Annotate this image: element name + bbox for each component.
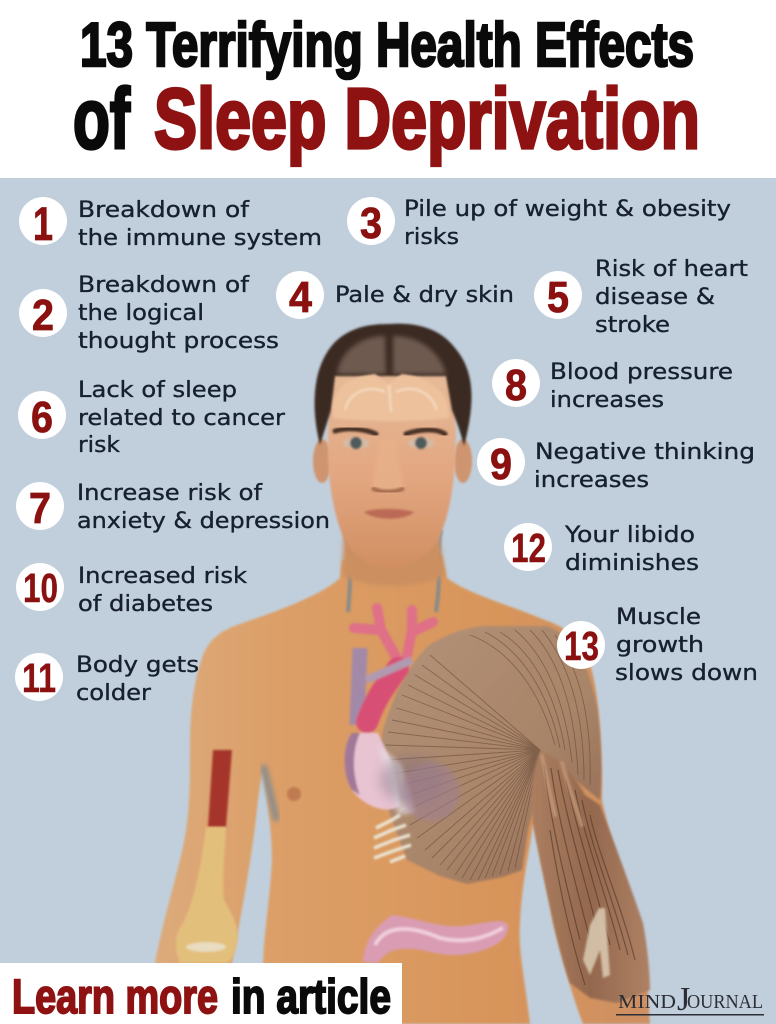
text 10 [78,564,247,617]
left carotid artery branch [354,608,398,660]
armpit hair [264,768,276,818]
callout 4: skin [276,271,514,322]
text 11: colder [76,681,152,706]
number 13: 13 [564,623,599,669]
badge 6 [18,391,66,439]
callout 12: libido [504,523,699,576]
text 13: slows down [615,661,758,686]
left arm bone: joint highlight [186,942,226,952]
text 11 [76,653,199,706]
badge 5 [534,271,582,319]
text 2 [78,273,279,354]
number 7: 7 [29,484,51,533]
callout 5: heart disease [534,257,748,338]
text 3: Pile up of weight & obesity [404,197,731,222]
badge 9 [477,438,525,486]
badge 1 [19,197,67,245]
nipple [287,787,301,801]
intestine highlights [375,928,503,945]
number 6: 6 [31,393,53,442]
right carotid artery branch [407,610,433,656]
text 5: Risk of heart [595,257,748,282]
number 10: 10 [23,565,58,611]
text 13: Muscle [616,605,701,630]
heart and arteries [344,608,433,810]
badge 13 [557,621,605,669]
badge 12 [504,523,552,571]
text 5 [595,257,748,338]
number 2: 2 [32,291,54,340]
callout 6: cancer [18,378,286,458]
text 5: stroke [595,313,670,338]
callout 7: anxiety and depression [16,481,330,534]
text 10: Increased risk [78,564,247,589]
number 1: 1 [33,197,53,250]
callout 10: diabetes [16,563,247,617]
title [73,11,700,167]
mouth [364,509,414,519]
callout 3: weight and obesity [347,197,731,250]
footer white box [0,963,402,1024]
callout 1: immune system [19,197,322,251]
text 6: risk [78,433,120,458]
number 9: 9 [490,440,512,489]
text 8 [550,360,733,413]
badge 10 [16,563,64,611]
human figure illustration [150,324,650,1024]
text 7: anxiety & depression [77,509,330,534]
number 12: 12 [511,525,546,571]
learn more text: Learn more [12,971,218,1024]
hair [315,324,471,446]
text 11: Body gets [76,653,199,678]
text 10: of diabetes [78,592,213,617]
badge 7 [16,482,64,530]
pulmonary vessel [366,660,412,680]
badge 11 [15,653,63,701]
pectoral fibres [385,630,590,880]
aortic arch [367,668,398,722]
callout 11: body temperature [15,653,199,706]
text 1 [78,198,322,251]
vena cava [357,648,360,725]
callout 8: blood pressure [492,359,733,413]
eyes [343,437,434,449]
neck veins [345,528,441,612]
logo: Mind Journal [616,981,764,1018]
ribs cartilage [374,815,411,862]
text 6: related to cancer [78,406,286,431]
brain forehead patch [332,374,449,421]
brain fissure [387,332,391,376]
text 12: diminishes [565,551,699,576]
text 13: growth [616,633,704,658]
text 3 [404,197,731,250]
callout 9: negative thinking [477,438,755,493]
wrist tendons [583,908,610,978]
callout 13: muscle growth [557,605,758,686]
nose shadow [372,488,404,492]
forearm muscle lines [544,765,635,985]
heart shadow patch [380,756,444,804]
badge 3 [347,197,395,245]
text 8: increases [550,388,664,413]
text 3: risks [404,225,459,250]
pectoral muscle [376,626,601,884]
badge 4 [276,271,324,319]
text 9 [534,440,755,493]
left arm bone: shaft and joint [176,827,238,963]
logo: Mind Journal: MIND [618,991,676,1013]
text 13 [615,605,758,686]
text 2: thought process [78,329,279,354]
ears [313,439,472,483]
text 6: Lack of sleep [78,378,237,403]
logo: Mind Journal: J [677,981,690,1018]
text 6 [78,378,286,458]
text 7 [77,481,330,534]
text 8: Blood pressure [550,360,733,385]
text 12 [564,523,699,576]
text 9: increases [534,468,649,493]
heart pale fibre patch [378,745,415,815]
brain top lobes [337,336,446,374]
number 5: 5 [547,273,569,322]
text 12: Your libido [564,523,695,548]
text 9: Negative thinking [535,440,755,465]
left arm bone: marrow [208,750,232,827]
text 1: Breakdown of [78,198,250,223]
text 2: the logical [78,301,204,326]
heart body [344,733,400,810]
text 5: disease & [595,285,715,310]
number 11: 11 [22,655,56,701]
text 4: Pale & dry skin [335,283,514,308]
lung patch [402,763,460,821]
neck [342,530,445,586]
biceps highlights [542,756,582,825]
nose [372,440,404,492]
logo: Mind Journal: OURNAL [687,991,763,1013]
body silhouette [150,555,650,1024]
text 2: Breakdown of [78,273,250,298]
number 8: 8 [505,361,527,410]
face [328,370,456,568]
text 7: Increase risk of [77,481,263,506]
title word: of: of [73,72,130,167]
text 1: the immune system [78,226,322,251]
pancreas and intestine [363,915,508,963]
badge 2 [19,289,67,337]
right arm muscles [532,752,650,1003]
callout 2: logical thought [19,273,279,354]
in article text: in article [231,971,391,1024]
number 4: 4 [289,273,312,322]
number 3: 3 [360,199,382,248]
badge 8 [492,359,540,407]
eyebrows [335,429,445,434]
footer call to action [0,963,402,1024]
